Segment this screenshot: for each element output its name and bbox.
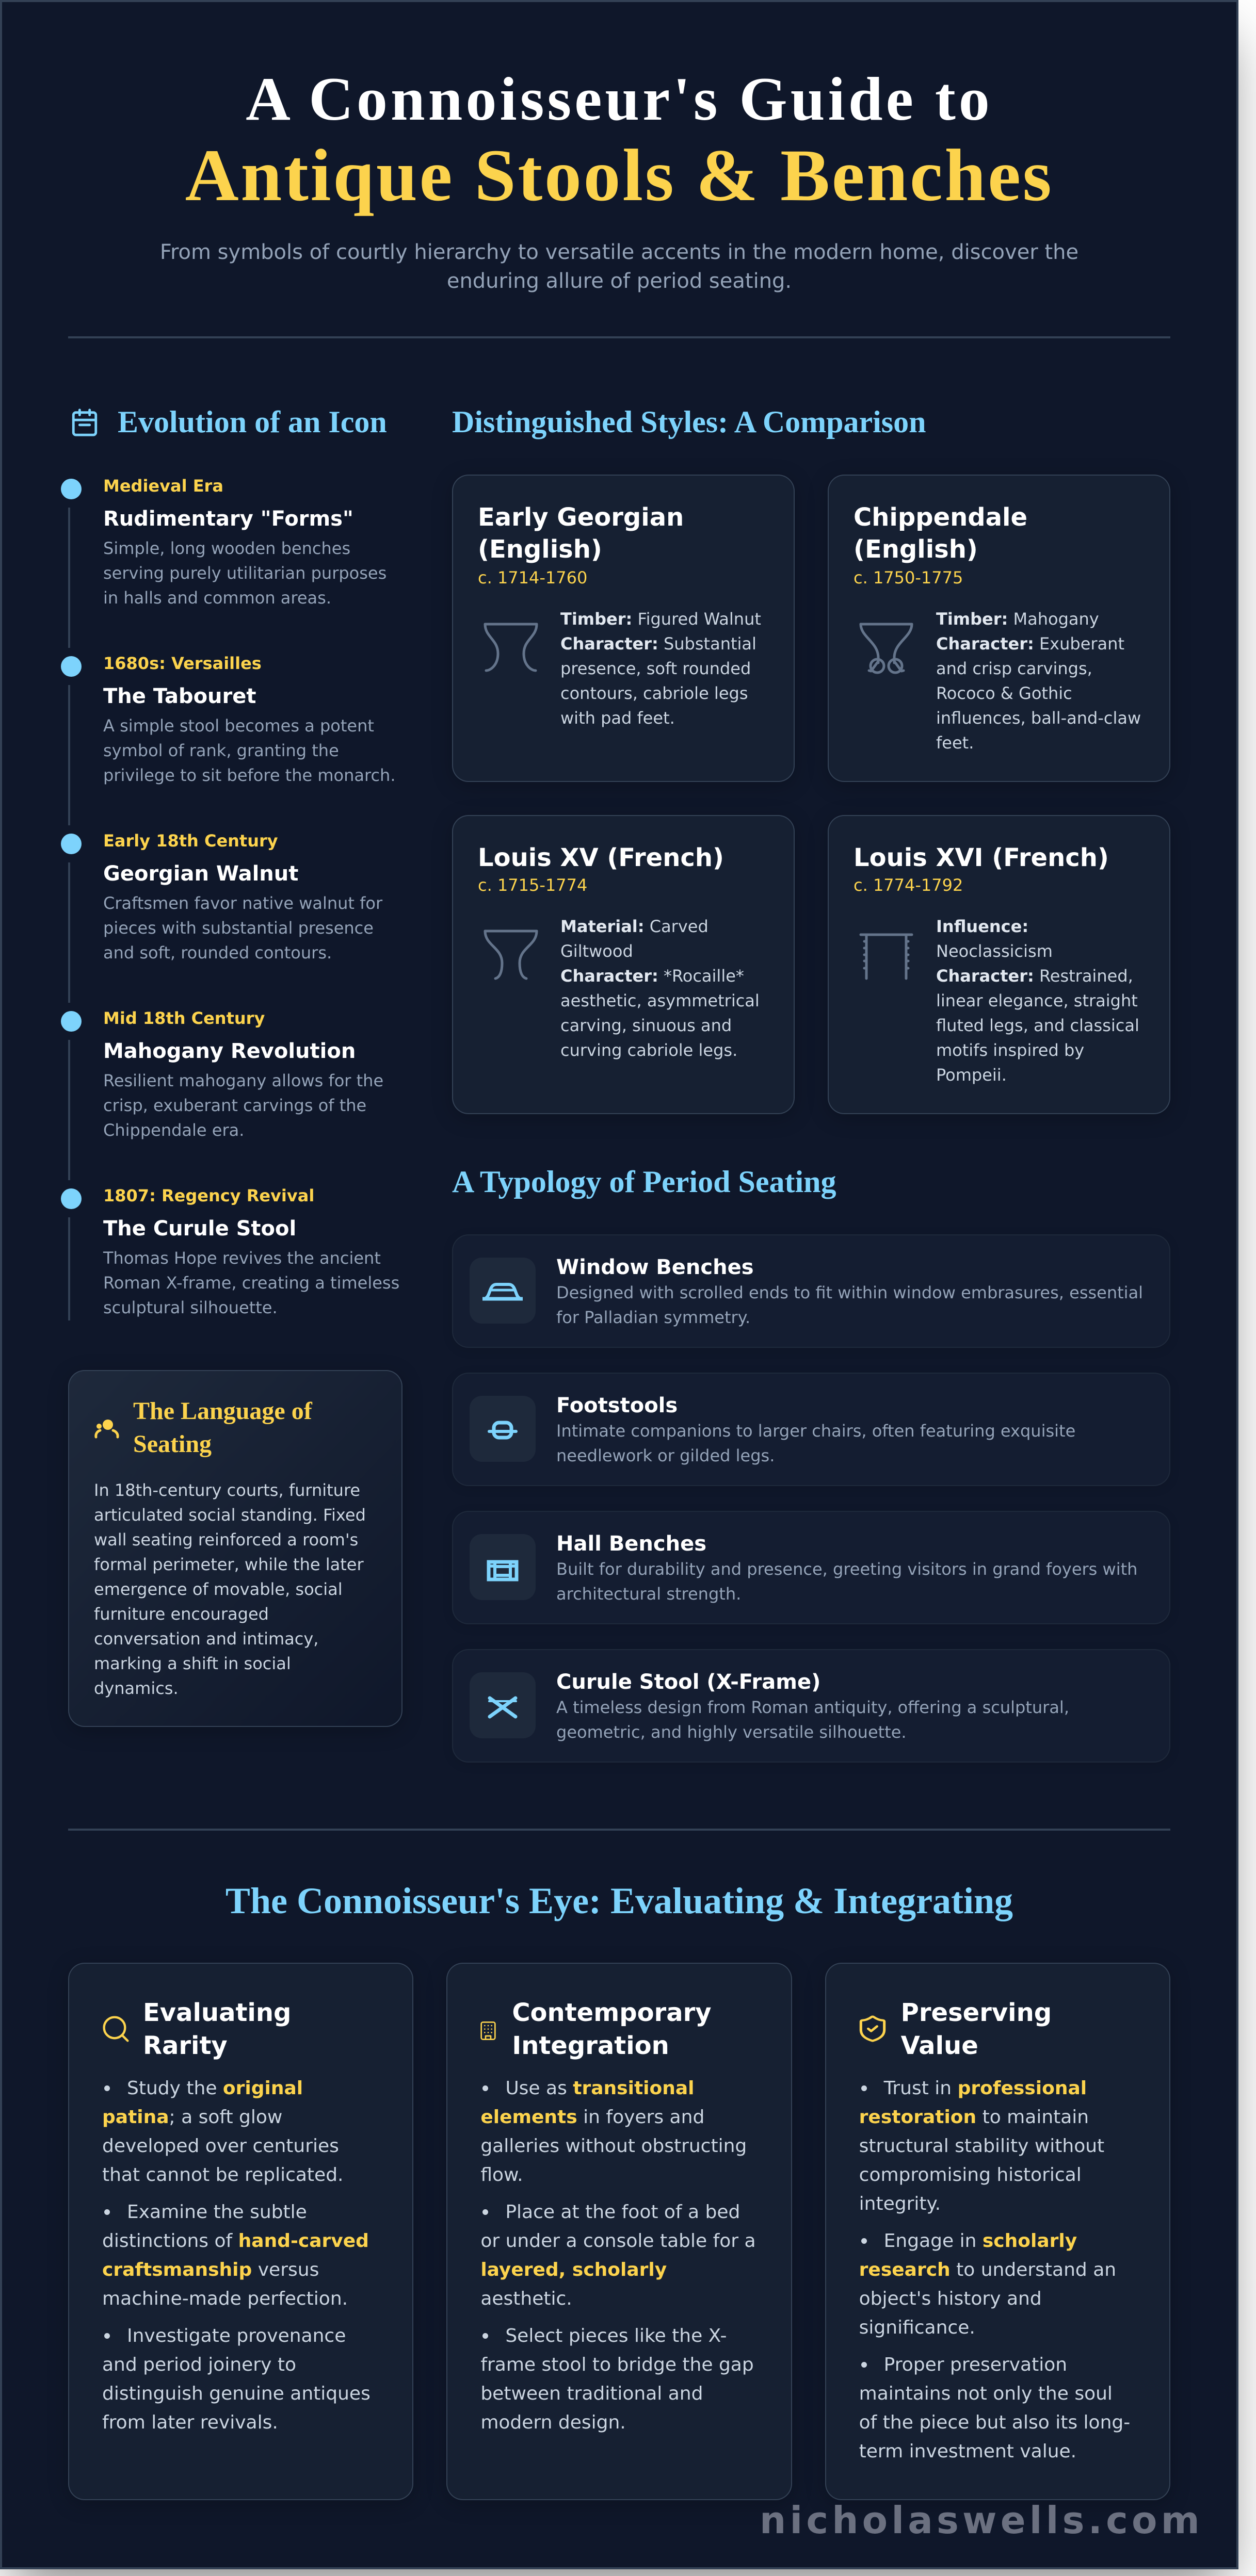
description: presence, soft rounded [560, 659, 751, 678]
timeline item: versailles [61, 654, 395, 825]
body text: marking a shift in social [94, 1654, 291, 1673]
item description: Designed with scrolled ends to fit within window embrasures, essential [556, 1283, 1143, 1302]
icon: x-frame stool [470, 1672, 536, 1738]
description: Character: Restrained, [936, 966, 1133, 986]
description: Timber: Figured Walnut [560, 609, 761, 629]
title line 2: Antique Stools & Benches [185, 135, 1053, 217]
timeline item: versailles: The Tabouret [103, 684, 256, 708]
description: Rococo & Gothic [936, 683, 1072, 703]
card title: Value [901, 2031, 978, 2060]
card title: Integration [512, 2031, 669, 2060]
panel: hall benches [452, 1511, 1170, 1624]
bullet 1: galleries without obstructing [480, 2135, 747, 2157]
body text: dynamics. [94, 1678, 179, 1698]
bullet 1: structural stability without [859, 2135, 1104, 2157]
card title: Louis XV (French) [478, 843, 724, 872]
icon: window bench [470, 1258, 536, 1324]
heading: Seating [133, 1430, 212, 1458]
bullet 1 [859, 2074, 1153, 2219]
description: Influence: [936, 917, 1028, 936]
panel: curule stool [452, 1649, 1170, 1763]
panel: window benches [452, 1234, 1170, 1348]
timeline item: regency revival: 1807: Regency Revival [103, 1186, 314, 1205]
bullet 2: or under a console table for a [480, 2230, 756, 2252]
bullet 1: flow. [480, 2164, 523, 2186]
panel: louis xv [452, 815, 795, 1114]
item description: architectural strength. [556, 1584, 741, 1604]
bullet 2: machine-made perfection. [102, 2288, 348, 2309]
card title: Early Georgian [478, 503, 684, 532]
description: Pompeii. [936, 1065, 1007, 1085]
description [936, 914, 1139, 1087]
icon: building [478, 2020, 498, 2041]
description: Character: Exuberant [936, 634, 1124, 654]
body text: emergence of movable, social [94, 1579, 343, 1599]
description: Neoclassicism [936, 941, 1053, 961]
item description: Intimate companions to larger chairs, often featuring exquisite [556, 1421, 1075, 1441]
icon: people [94, 1420, 119, 1438]
icon: cabriole leg stool [484, 623, 538, 672]
bullet 2: research to understand an [859, 2259, 1116, 2280]
description: fluted legs, and classical [936, 1016, 1139, 1035]
description: aesthetic, asymmetrical [560, 991, 760, 1010]
description: Timber: Mahogany [936, 609, 1099, 629]
bullet 2: aesthetic. [480, 2288, 572, 2309]
timeline item: early 18th century: Georgian Walnut [103, 862, 298, 886]
item description: Built for durability and presence, greeting visitors in grand foyers with [556, 1559, 1137, 1579]
bullet 2 [102, 2198, 396, 2313]
description: Character: Substantial [560, 634, 756, 654]
bullet 3: of the piece but also its long- [859, 2412, 1130, 2433]
item description [556, 1280, 1143, 1330]
bullet 2: Engage in scholarly [884, 2230, 1077, 2252]
description [560, 609, 761, 728]
bullet 2: object's history and [859, 2288, 1042, 2309]
item title: Curule Stool (X-Frame) [556, 1670, 820, 1694]
subtitle: enduring allure of period seating. [447, 269, 792, 293]
bullet 1: Use as transitional [505, 2078, 695, 2099]
body text: In 18th-century courts, furniture [94, 1480, 360, 1500]
timeline item: regency revival: The Curule Stool [103, 1217, 296, 1241]
bullet 1 [480, 2074, 775, 2190]
timeline item: mid 18th century: crisp, exuberant carvings of the [103, 1096, 366, 1115]
period: c. 1714-1760 [478, 568, 587, 588]
timeline item: regency revival: Thomas Hope revives the ancient [103, 1248, 381, 1268]
description [936, 607, 1141, 755]
bullet 3: Select pieces like the X- [505, 2325, 727, 2346]
icon: fluted leg stool [859, 926, 915, 988]
panel: preserving value [825, 1963, 1170, 2500]
panel: early georgian [452, 475, 795, 782]
bullet 1: Study the original [127, 2078, 303, 2099]
card title [512, 1996, 712, 2062]
bullet 1: Trust in professional [884, 2078, 1087, 2099]
body text: formal perimeter, while the later [94, 1555, 364, 1574]
timeline item: mid 18th century [61, 1008, 383, 1180]
item description: geometric, and highly versatile silhouette. [556, 1722, 907, 1742]
bullet 2: significance. [859, 2317, 975, 2338]
card title: Chippendale [854, 503, 1027, 532]
card title: Contemporary [512, 1998, 712, 2027]
item description: for Palladian symmetry. [556, 1308, 750, 1327]
timeline item: mid 18th century: Chippendale era. [103, 1120, 244, 1140]
timeline item: regency revival: sculptural silhouette. [103, 1298, 278, 1317]
card title: Evaluating [143, 1998, 291, 2027]
bullet 3: frame stool to bridge the gap [480, 2354, 754, 2375]
card title [478, 503, 684, 564]
heading: The Language of [133, 1397, 312, 1425]
bullet 3 [480, 2322, 775, 2437]
panel: footstools [452, 1373, 1170, 1486]
bullet 1: developed over centuries [102, 2135, 339, 2157]
timeline item: medieval era: serving purely utilitarian purposes [103, 563, 387, 583]
description: motifs inspired by [936, 1040, 1084, 1060]
card title: (English) [478, 535, 602, 564]
bullet 2: craftsmanship versus [102, 2259, 319, 2280]
timeline item: medieval era: Rudimentary "Forms" [103, 507, 353, 531]
bullet 3: and period joinery to [102, 2354, 296, 2375]
timeline item: medieval era: in halls and common areas. [103, 588, 331, 608]
bullet 3 [102, 2322, 396, 2437]
card title: Louis XVI (French) [854, 843, 1109, 872]
period: c. 1715-1774 [478, 875, 587, 895]
bullet 3 [859, 2351, 1153, 2466]
timeline item: versailles: A simple stool becomes a potent [103, 716, 374, 736]
timeline item: medieval era: Simple, long wooden benches [103, 539, 350, 558]
bullet 2: Examine the subtle [127, 2202, 307, 2223]
icon: ball-and-claw stool [860, 623, 913, 674]
bullet 1: patina; a soft glow [102, 2107, 282, 2128]
body text: wall seating reinforced a room's [94, 1530, 358, 1550]
timeline item: medieval era: Medieval Era [103, 476, 223, 496]
heading [133, 1397, 313, 1458]
icon: shield check [855, 2014, 890, 2043]
bullet 1: restoration to maintain [859, 2107, 1089, 2128]
description: curving cabriole legs. [560, 1040, 737, 1060]
description: carving, sinuous and [560, 1016, 732, 1035]
timeline item: early 18th century [61, 831, 383, 1003]
timeline item: mid 18th century: Mid 18th Century [103, 1008, 265, 1028]
bullet 2: layered, scholarly [480, 2259, 667, 2280]
bullet 2: Place at the foot of a bed [505, 2202, 740, 2223]
bullet 3: maintains not only the soul [859, 2383, 1113, 2404]
bullet 3: between traditional and [480, 2383, 703, 2404]
item description: A timeless design from Roman antiquity, offering a sculptural, [556, 1698, 1069, 1717]
item description [556, 1557, 1137, 1606]
bullet 3: from later revivals. [102, 2412, 278, 2433]
heading: typology: A Typology of Period Seating [452, 1165, 836, 1199]
icon: search [100, 2013, 132, 2045]
item title: Footstools [556, 1394, 678, 1417]
description: linear elegance, straight [936, 991, 1138, 1010]
body text [94, 1480, 366, 1698]
item description [556, 1419, 1075, 1468]
description: Material: Carved [560, 917, 708, 936]
timeline item: early 18th century: and soft, rounded contours. [103, 943, 332, 963]
bullet 1: integrity. [859, 2193, 941, 2214]
period: c. 1774-1792 [854, 875, 963, 895]
body text: articulated social standing. Fixed [94, 1505, 366, 1525]
description: contours, cabriole legs [560, 683, 748, 703]
description: Character: *Rocaille* [560, 966, 744, 986]
description [560, 914, 760, 1063]
subtitle [160, 240, 1078, 293]
card title [854, 503, 1027, 564]
timeline item: early 18th century: Early 18th Century [103, 831, 278, 851]
timeline item: regency revival [61, 1186, 399, 1320]
timeline item: versailles: symbol of rank, granting the [103, 741, 339, 760]
card title: Preserving [901, 1998, 1052, 2027]
card title [901, 1996, 1052, 2062]
heading: connoisseur's eye: The Connoisseur's Eye: Evaluating & Integrating [226, 1880, 1013, 1921]
watermark: nicholaswells.com [760, 2499, 1203, 2542]
panel: louis xvi [828, 815, 1170, 1114]
heading: evolution of an icon: Evolution of an Icon [118, 405, 387, 439]
timeline item: early 18th century: pieces with substantial presence [103, 918, 374, 938]
panel: evaluating rarity [68, 1963, 413, 2500]
panel: contemporary integration [446, 1963, 792, 2500]
bullet 1: compromising historical [859, 2164, 1082, 2186]
icon: footstool [470, 1396, 536, 1462]
heading: distinguished styles: Distinguished Styles: A Comparison [452, 405, 926, 439]
body text: conversation and intimacy, [94, 1629, 318, 1649]
bullet 1 [102, 2074, 396, 2190]
bullet 3: modern design. [480, 2412, 626, 2433]
timeline item: versailles: 1680s: Versailles [103, 654, 262, 673]
title line 1: A Connoisseur's Guide to [246, 64, 993, 133]
panel: chippendale [828, 475, 1170, 782]
bullet 2 [480, 2198, 775, 2313]
bullet 3: Proper preservation [884, 2354, 1067, 2375]
description: with pad feet. [560, 708, 675, 728]
description: influences, ball-and-claw [936, 708, 1141, 728]
bullet 3: distinguish genuine antiques [102, 2383, 371, 2404]
body text: furniture encouraged [94, 1604, 269, 1624]
card title: Rarity [143, 2031, 228, 2060]
icon: calendar [72, 409, 97, 436]
item description [556, 1695, 1069, 1744]
panel: language of seating [68, 1370, 402, 1727]
timeline item: versailles: privilege to sit before the monarch. [103, 765, 395, 785]
description: and crisp carvings, [936, 659, 1092, 678]
item title: Window Benches [556, 1256, 754, 1279]
bullet 1: that cannot be replicated. [102, 2164, 344, 2186]
timeline item: mid 18th century: Mahogany Revolution [103, 1039, 356, 1063]
bullet 2: distinctions of hand-carved [102, 2230, 369, 2252]
period: c. 1750-1775 [854, 568, 963, 588]
subtitle: From symbols of courtly hierarchy to versatile accents in the modern home, discover the [160, 240, 1078, 264]
bullet 2 [859, 2227, 1153, 2342]
timeline item: mid 18th century: Resilient mahogany allows for the [103, 1071, 383, 1090]
bullet 3: Investigate provenance [127, 2325, 346, 2346]
icon: sinuous leg stool [483, 926, 540, 988]
item title: Hall Benches [556, 1532, 706, 1556]
panel: timeline [61, 476, 399, 1320]
description: Giltwood [560, 941, 633, 961]
icon: hall bench [470, 1534, 536, 1600]
card title [143, 1996, 291, 2062]
timeline item: early 18th century: Craftsmen favor native walnut for [103, 893, 382, 913]
bullet 1: elements in foyers and [480, 2107, 704, 2128]
bullet 3: term investment value. [859, 2441, 1076, 2462]
timeline item: medieval era [61, 476, 387, 648]
timeline item: regency revival: Roman X-frame, creating a timeless [103, 1273, 399, 1293]
item description: needlework or gilded legs. [556, 1446, 775, 1465]
card title: (English) [854, 535, 978, 564]
description: feet. [936, 733, 974, 753]
